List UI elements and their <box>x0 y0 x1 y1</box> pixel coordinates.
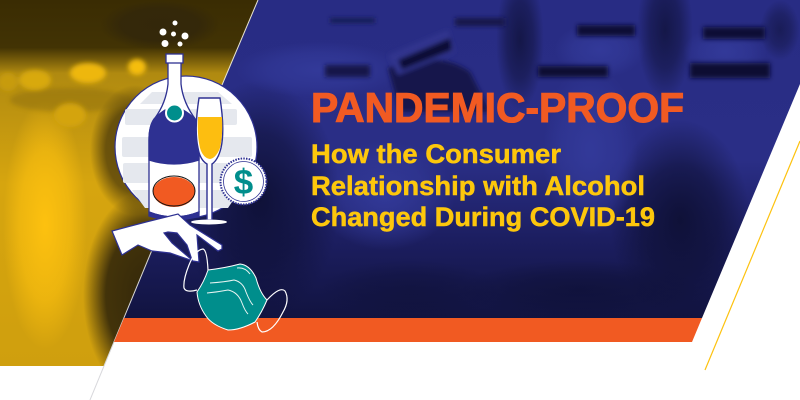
icon: bubbles <box>160 20 188 47</box>
title: PANDEMIC-PROOF <box>311 84 684 131</box>
icon: face mask <box>184 249 287 332</box>
icon: champagne flute <box>191 98 227 224</box>
icon: dollar badge <box>220 158 266 204</box>
icon: champagne bottle <box>149 54 199 220</box>
yellow accent line <box>705 141 800 370</box>
orange bar <box>114 318 702 342</box>
subtitle: Relationship with Alcohol <box>311 171 645 201</box>
subtitle: Changed During COVID-19 <box>311 202 655 232</box>
icon: dollar badge: $ <box>234 163 253 202</box>
divider line between panels <box>222 0 258 85</box>
icon: hand <box>112 214 222 262</box>
panel: yellow blurred photo <box>0 0 258 400</box>
subtitle <box>311 139 655 232</box>
subtitle: How the Consumer <box>311 139 561 169</box>
panel: navy blurred photo of bottle caps <box>110 0 800 320</box>
icon: globe disc <box>115 76 257 218</box>
